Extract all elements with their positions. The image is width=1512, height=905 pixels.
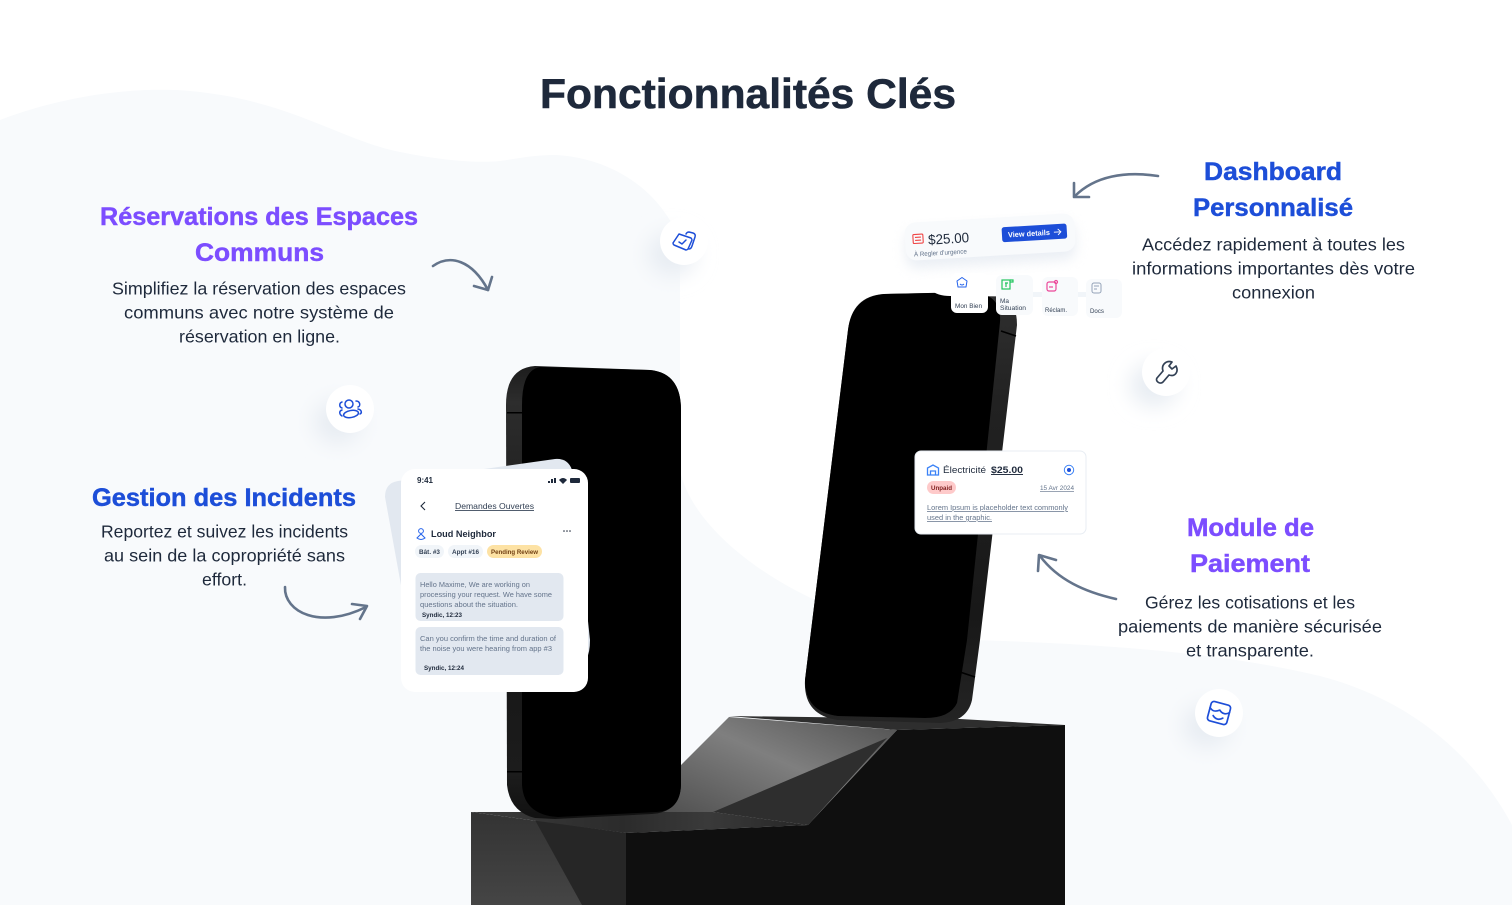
heading: réservations [100,203,418,267]
text: incidents: au sein de la copropriété sans [104,546,345,566]
card: payment summary [904,213,1095,297]
card: electricity bill: Électricité [943,465,986,476]
card: incident details: Loud Neighbor [431,529,496,539]
heading: paiement: Module de [1187,514,1314,542]
card: navigation tabs: Mon Bien [955,303,982,310]
text: réservations: Simplifiez la réservation des espaces [112,278,406,298]
text: incidents [101,522,348,590]
arrow: paiement [1038,555,1116,599]
icon: store [1183,689,1243,748]
card: navigation tabs: Réclam. [1045,307,1067,314]
heading: dashboard [1193,158,1353,222]
card: navigation tabs: Situation [1000,305,1026,312]
heading: dashboard: Dashboard [1204,158,1342,186]
card: electricity bill: Lorem Ipsum is placeholder text commonly [927,503,1068,512]
text: dashboard: informations importantes dès votre [1132,258,1415,278]
right phone [805,292,1017,723]
heading: paiement [1187,514,1314,578]
card: incident details: questions about the situation. [420,600,518,609]
text: réservations: réservation en ligne. [179,326,340,346]
card: incident details: Appt #16 [452,549,479,556]
text: dashboard: connexion [1232,282,1315,302]
text: réservations: communs avec notre système de [124,302,394,322]
pedestal [471,716,1065,905]
heading: incidents: Gestion des Incidents [92,484,356,512]
card: incident details: Syndic, 12:24 [424,665,464,672]
card: incident details: Syndic, 12:23 [422,612,462,619]
text: paiement [1118,592,1382,660]
card: payment summary: View details [1008,228,1050,239]
heading: paiement: Paiement [1190,550,1311,578]
arrow: incidents [285,587,367,619]
text: dashboard: Accédez rapidement à toutes les [1142,234,1405,254]
text: paiement: paiements de manière sécurisée [1118,616,1382,636]
title: Fonctionnalités Clés [540,70,956,117]
card: electricity bill: 15 Avr 2024 [1040,485,1074,492]
heading: réservations: Communs [195,239,324,267]
arrow: réservations [433,260,492,290]
card: navigation tabs: Docs [1090,308,1105,315]
card: incident details [385,459,590,692]
card: electricity bill: $25.00 [991,465,1023,476]
card: electricity bill: Unpaid [931,485,952,492]
card: incident details: Pending Review [491,549,539,556]
card: incident details: the noise you were hearing from app #3 [420,644,552,653]
text: incidents: effort. [202,570,247,590]
card: incident details: Can you confirm the time and duration of [420,634,557,643]
card: navigation tabs: Ma [1000,298,1009,305]
text: paiement: et transparente. [1186,640,1314,660]
icon: users [314,385,374,444]
card: navigation tabs [951,273,1122,318]
text: réservations [112,278,406,346]
card: incident details: processing your request. We have some [420,590,552,599]
heading: dashboard: Personnalisé [1193,194,1353,222]
text: paiement: Gérez les cotisations et les [1145,592,1355,612]
text: incidents: Reportez et suivez les incidents [101,522,348,542]
left phone [506,366,681,819]
card: incident details: 9:41 [417,476,434,485]
text: dashboard [1132,234,1415,302]
card: electricity bill: used in the graphic. [927,513,992,522]
card: payment summary: $25.00 [928,229,970,248]
card: incident details: Demandes Ouvertes [455,501,534,511]
arrow: dashboard [1074,174,1158,197]
card: incident details: Bât. #3 [419,549,440,556]
card: incident details: Hello Maxime, We are working on [420,580,530,589]
card: electricity bill [915,451,1086,534]
icon: wrench [1130,348,1190,407]
card: payment summary: À Regler d'urgence [914,246,967,259]
icon: calendar check [648,217,708,276]
heading: réservations: Réservations des Espaces [100,203,418,231]
